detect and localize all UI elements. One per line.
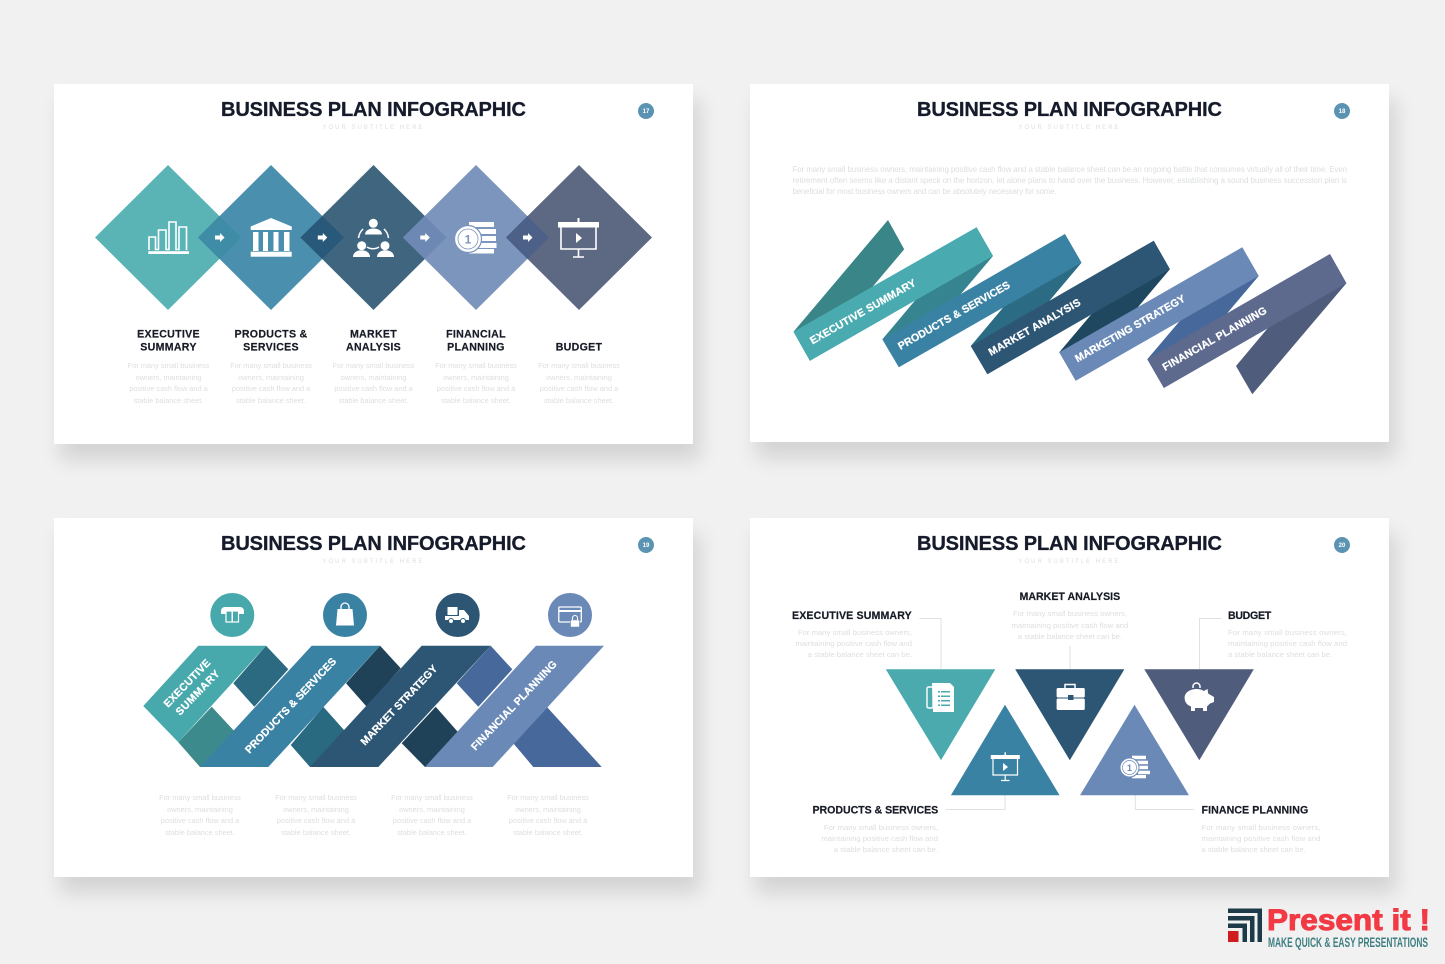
- column: market analysis: stable balance sheet.: [339, 396, 408, 405]
- callout: finance planning: [1202, 804, 1320, 854]
- text column 2: For many small business: [275, 793, 357, 802]
- column: products and services: positive cash flow and a: [232, 384, 311, 393]
- icon: coin stack: 1: [465, 232, 472, 246]
- triangle: products and services: [951, 705, 1060, 795]
- icon: bank: [251, 218, 292, 257]
- title: BUSINESS PLAN INFOGRAPHIC: [917, 99, 1222, 121]
- band: financial planning: FINANCIAL PLANNING: [1161, 305, 1269, 374]
- column: executive summary: [128, 328, 210, 405]
- callout: budget: For many small business owners,: [1228, 628, 1347, 637]
- icon: card and lock circle: [548, 593, 592, 637]
- callout: budget: a stable balance sheet can be.: [1228, 650, 1332, 659]
- callout: finance planning: maintaining positive cash flow and: [1202, 834, 1320, 843]
- band: executive summary: [143, 646, 266, 742]
- icon: presentation board: [991, 752, 1020, 780]
- text column 3: stable balance sheet.: [397, 828, 467, 837]
- title: BUSINESS PLAN INFOGRAPHIC: [221, 99, 526, 121]
- text column 3: owners, maintaining: [399, 805, 465, 814]
- callout: finance planning: FINANCE PLANNING: [1202, 804, 1308, 816]
- intro paragraph: retirement often seems like a distant speck on the horizon, let alone plans to hand over the business. However, establishing a sound business succession plan is: [792, 176, 1347, 185]
- icon: team cycle: [353, 219, 394, 257]
- page badge: [638, 103, 654, 119]
- diamond chain: [95, 165, 652, 310]
- callout: products and services: a stable balance sheet can be.: [834, 845, 938, 854]
- text column 3: positive cash flow and a: [393, 816, 472, 825]
- intro paragraph: For many small business owners, maintaining positive cash flow and a stable balance sheet can be an ongoing battle that consumes virtually all of their time. Even: [792, 165, 1347, 174]
- page badge: 18: [1339, 109, 1346, 115]
- column: market analysis: positive cash flow and a: [334, 384, 414, 393]
- column: market analysis: MARKET: [350, 328, 397, 340]
- text column 1: [159, 793, 241, 837]
- column: market analysis: ANALYSIS: [346, 342, 401, 354]
- callout: budget: [1228, 610, 1347, 659]
- callout: products and services: PRODUCTS & SERVICES: [812, 804, 938, 816]
- icon: bar chart: [148, 222, 189, 254]
- callout: executive summary: maintaining positive cash flow and: [795, 639, 912, 648]
- text column 1: stable balance sheet.: [165, 828, 235, 837]
- triangle: finance planning: [1080, 705, 1189, 795]
- band: financial planning: FINANCIAL PLANNING: [469, 658, 560, 753]
- band: products and services: [882, 234, 1082, 367]
- icon: document: [927, 683, 954, 712]
- icon: delivery truck circle: [436, 593, 480, 637]
- callout: executive summary: a stable balance sheet can be.: [808, 650, 912, 659]
- icon: presentation board: [558, 218, 599, 257]
- text column 2: positive cash flow and a: [277, 816, 356, 825]
- callout: products and services: [812, 804, 938, 854]
- callout: executive summary: EXECUTIVE SUMMARY: [792, 610, 912, 622]
- logo: present it: Present it !: [1267, 904, 1430, 937]
- callout: products and services: For many small business owners,: [824, 823, 938, 832]
- column: executive summary: stable balance sheet.: [134, 396, 203, 405]
- callout: budget: BUDGET: [1228, 610, 1272, 622]
- leader lines: [919, 618, 1222, 810]
- column: budget: stable balance sheet.: [544, 396, 614, 405]
- column: executive summary: SUMMARY: [140, 342, 197, 354]
- text column 1: For many small business: [159, 793, 241, 802]
- callout: market analysis: a stable balance sheet can be.: [1018, 632, 1122, 641]
- logo: present it: [1228, 904, 1430, 950]
- icon: coin stack: [454, 222, 496, 254]
- text column 3: For many small business: [391, 793, 473, 802]
- band: executive summary: EXECUTIVE SUMMARY: [808, 277, 918, 347]
- triangle: executive summary: [886, 669, 995, 760]
- column: budget: For many small business: [538, 361, 620, 370]
- column: financial planning: stable balance sheet.: [441, 396, 511, 405]
- icon: briefcase: [1057, 684, 1085, 710]
- column: financial planning: FINANCIAL: [446, 328, 506, 340]
- text column 4: [507, 793, 589, 837]
- column: market analysis: [333, 328, 415, 405]
- column: products and services: PRODUCTS &: [234, 328, 308, 340]
- column: financial planning: PLANNING: [447, 342, 505, 354]
- band: market analysis: MARKET ANALYSIS: [987, 297, 1083, 359]
- subtitle: YOUR SUBTITLE HERE: [322, 125, 425, 131]
- panel: slide 17 diamonds: [54, 84, 693, 444]
- band: executive summary: EXECUTIVE: [162, 657, 213, 710]
- title: BUSINESS PLAN INFOGRAPHIC: [221, 533, 526, 555]
- column: products and services: owners, maintaining: [238, 373, 304, 382]
- triangle: market analysis: [1015, 669, 1124, 760]
- column: executive summary: positive cash flow and a: [129, 384, 209, 393]
- icon: coin stack: [1120, 756, 1150, 778]
- column: executive summary: For many small business: [128, 361, 210, 370]
- page badge: 20: [1339, 543, 1346, 549]
- icon: shopping bag circle: [323, 593, 367, 637]
- callout: finance planning: a stable balance sheet can be.: [1202, 845, 1306, 854]
- text column 4: owners, maintaining: [515, 805, 581, 814]
- woven under-strands: [178, 646, 602, 767]
- arrow 2: [318, 233, 327, 242]
- text column 1: owners, maintaining: [167, 805, 233, 814]
- text column 2: stable balance sheet.: [281, 828, 351, 837]
- column: products and services: stable balance sheet.: [236, 396, 306, 405]
- column: financial planning: owners, maintaining: [443, 373, 509, 382]
- band: financial planning: [425, 646, 604, 767]
- text column 4: For many small business: [507, 793, 589, 802]
- subtitle: YOUR SUBTITLE HERE: [1018, 559, 1121, 565]
- band: market strategy: MARKET STRATEGY: [358, 663, 440, 748]
- band: executive summary: SUMMARY: [174, 668, 222, 718]
- callout: market analysis: maintaining positive cash flow and: [1012, 621, 1128, 630]
- arrow 4: [523, 233, 532, 242]
- callout: products and services: maintaining positive cash flow and: [821, 834, 938, 843]
- page badge: [638, 537, 654, 553]
- subtitle: YOUR SUBTITLE HERE: [1018, 125, 1121, 131]
- panel: slide 20 triangles: [750, 518, 1389, 877]
- band: products and services: PRODUCTS & SERVICES: [896, 279, 1012, 353]
- band: marketing strategy: MARKETING STRATEGY: [1073, 293, 1188, 365]
- callout: budget: maintaining positive cash flow and: [1228, 639, 1347, 648]
- callout: market analysis: [1012, 591, 1128, 641]
- panel: slide 19 woven chevrons: [54, 518, 693, 877]
- text column 4: stable balance sheet.: [513, 828, 583, 837]
- page badge: 19: [643, 543, 650, 549]
- arrow 3: [420, 233, 430, 242]
- title: BUSINESS PLAN INFOGRAPHIC: [917, 533, 1222, 555]
- column: executive summary: owners, maintaining: [136, 373, 201, 382]
- intro paragraph: [792, 165, 1347, 196]
- icon: coin stack: 1: [1127, 763, 1132, 773]
- column: products and services: SERVICES: [243, 342, 299, 354]
- callout: market analysis: For many small business owners,: [1013, 609, 1127, 618]
- text column 1: positive cash flow and a: [161, 816, 240, 825]
- column: financial planning: For many small business: [435, 361, 517, 370]
- column: products and services: For many small business: [230, 361, 312, 370]
- column: executive summary: EXECUTIVE: [137, 328, 200, 340]
- column: financial planning: [435, 328, 517, 405]
- callout: market analysis: MARKET ANALYSIS: [1020, 591, 1120, 603]
- band: products and services: PRODUCTS & SERVICES: [243, 656, 339, 756]
- band: market analysis: [971, 241, 1170, 374]
- intro paragraph: beneficial for most business owners and can be absolutely necessary for some.: [792, 187, 1056, 196]
- band: financial planning: [1147, 254, 1346, 388]
- triangle: budget: [1144, 669, 1254, 760]
- band: executive summary: [794, 227, 993, 361]
- icon: piggy bank: [1185, 683, 1214, 711]
- column: budget: BUDGET: [556, 342, 602, 354]
- ribbon folds: [794, 220, 1346, 394]
- icon: atm circle: [210, 593, 254, 637]
- band: market strategy: [310, 646, 491, 767]
- column: products and services: [230, 328, 312, 405]
- page badge: [1334, 537, 1350, 553]
- subtitle: YOUR SUBTITLE HERE: [322, 559, 425, 565]
- text column 4: positive cash flow and a: [509, 816, 588, 825]
- band: products and services: [200, 646, 380, 767]
- panel: slide 18 ribbon: [750, 84, 1389, 442]
- column: market analysis: owners, maintaining: [341, 373, 406, 382]
- text column 2: owners, maintaining: [283, 805, 349, 814]
- page badge: [1334, 103, 1350, 119]
- text column 2: [275, 793, 357, 837]
- column: market analysis: For many small business: [333, 361, 415, 370]
- text column 3: [391, 793, 473, 837]
- column: budget: [538, 342, 620, 405]
- page badge: 17: [643, 109, 650, 115]
- callout: finance planning: For many small business owners,: [1202, 823, 1320, 832]
- band: marketing strategy: [1059, 247, 1259, 381]
- arrow 1: [215, 233, 224, 242]
- callout: executive summary: For many small business owners,: [798, 628, 912, 637]
- column: budget: owners, maintaining: [546, 373, 612, 382]
- column: financial planning: positive cash flow and a: [437, 384, 516, 393]
- callout: executive summary: [792, 610, 912, 659]
- column: budget: positive cash flow and a: [540, 384, 619, 393]
